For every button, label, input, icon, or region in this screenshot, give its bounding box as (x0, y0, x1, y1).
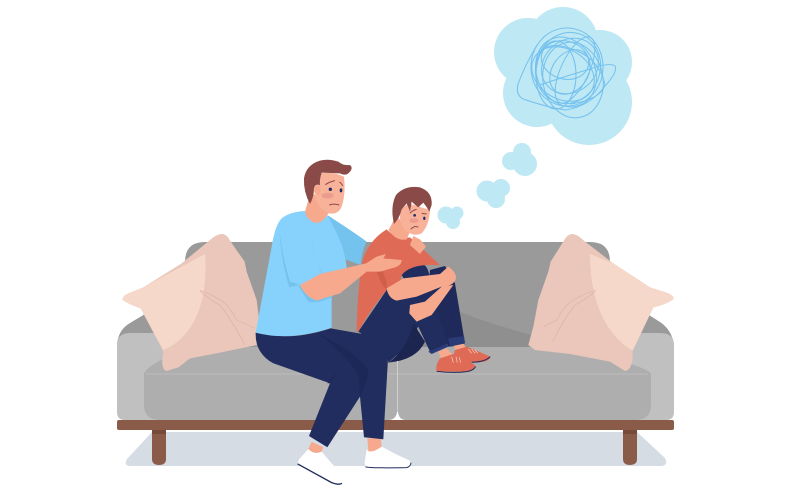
boy trousers (358, 263, 448, 363)
man far shoe (365, 447, 411, 467)
boy face (400, 203, 430, 235)
small thought cloud upper (502, 143, 537, 176)
large thought cloud (494, 7, 632, 145)
boy neck (388, 215, 410, 240)
man neck (305, 192, 332, 223)
boy shoe far (453, 347, 490, 362)
boy hair (392, 187, 432, 224)
pillow left (123, 234, 260, 371)
sofa arm right (610, 333, 674, 420)
thought bubbles (438, 7, 632, 229)
man trousers (256, 328, 388, 447)
boy shoe near (436, 354, 476, 372)
sofa leg right (623, 430, 637, 465)
boy hand on shoulder (410, 236, 426, 254)
tangled scribble (517, 23, 616, 123)
pillow right (528, 234, 674, 371)
man ankles (308, 438, 382, 453)
sofa (117, 242, 674, 465)
sofa frame (117, 420, 674, 430)
man (256, 160, 411, 484)
floor shadow (126, 432, 666, 466)
man arm reaching to boy (300, 254, 402, 301)
boy sweater (357, 229, 440, 332)
boy ankles (438, 343, 467, 361)
sofa arm left (117, 333, 190, 420)
man far sleeve (327, 215, 367, 265)
sofa leg left (152, 430, 166, 465)
man t-shirt (256, 211, 347, 336)
boy back trouser leg (427, 266, 465, 347)
boy eyes and mouth (410, 209, 427, 229)
sofa seat left (144, 347, 397, 420)
man face (315, 173, 345, 214)
sofa seat right (398, 347, 651, 420)
man near shoe (298, 449, 342, 484)
man eyes and brows (325, 181, 343, 205)
small thought cloud lower (438, 206, 464, 229)
sofa back (185, 242, 610, 300)
man ear (314, 185, 321, 195)
man hair (304, 160, 352, 204)
small thought cloud middle (476, 179, 510, 208)
boy (357, 187, 490, 372)
boy forearm around knees (387, 267, 456, 301)
